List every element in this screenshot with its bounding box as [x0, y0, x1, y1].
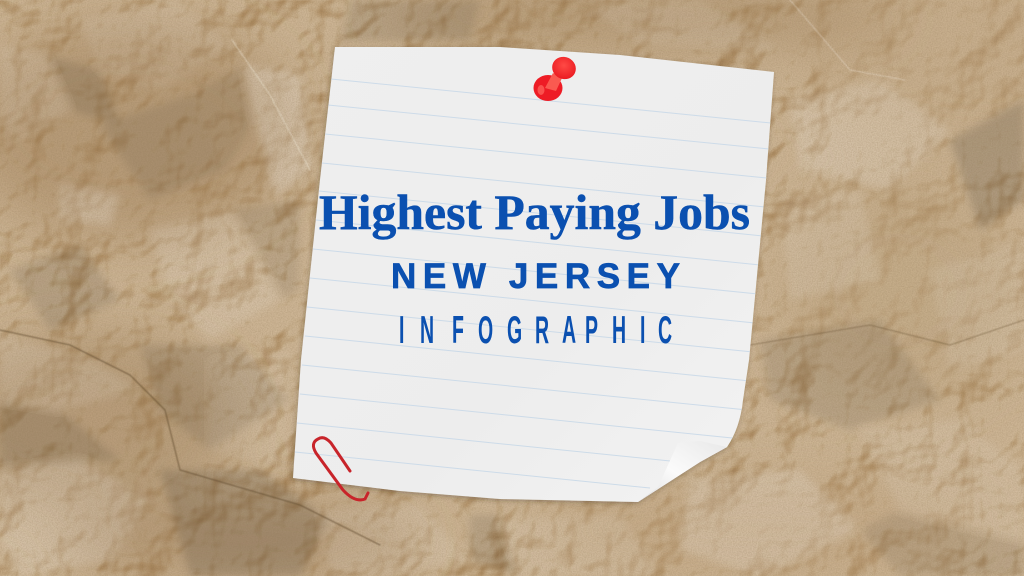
panel: lined note paper — [293, 47, 774, 502]
subtitle: New Jersey: NEW JERSEY — [391, 257, 680, 296]
icon: red paperclip — [313, 438, 368, 500]
label: Infographic: INFOGRAPHIC — [399, 308, 672, 352]
paper sheet — [293, 47, 774, 502]
icon: red push pin — [534, 53, 580, 101]
ruled lines — [295, 79, 771, 488]
curled corner — [638, 441, 727, 502]
title: Highest Paying Jobs: Highest Paying Jobs — [319, 184, 750, 240]
